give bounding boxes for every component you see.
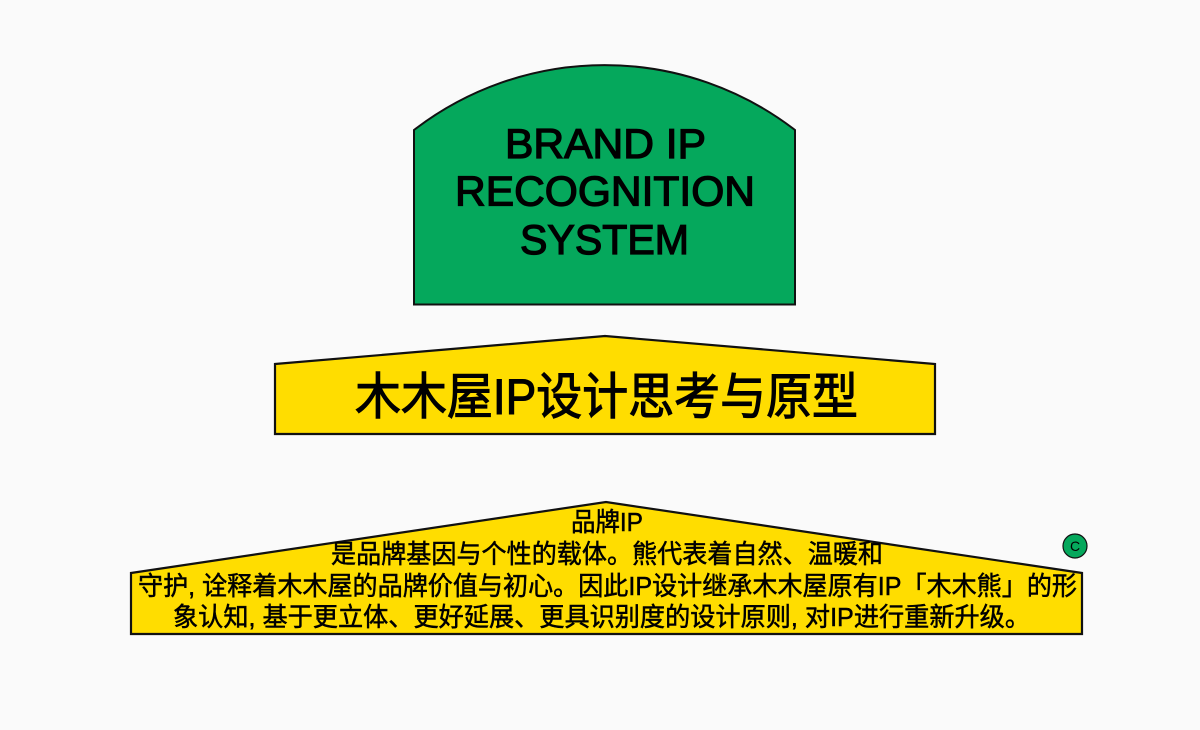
yellow roof-shaped panel <box>131 502 1082 634</box>
heading: BRAND IP RECOGNITION SYSTEM: BRAND IP <box>505 120 706 167</box>
heading: BRAND IP RECOGNITION SYSTEM: RECOGNITION <box>455 168 755 214</box>
description text block: 是品牌基因与个性的载体。熊代表着自然、温暖和 <box>331 539 883 569</box>
green arched shape <box>414 65 795 304</box>
description text block <box>138 507 1077 632</box>
heading: BRAND IP RECOGNITION SYSTEM: SYSTEM <box>520 216 689 263</box>
panel: subtitle banner <box>275 336 935 434</box>
subtitle: Mumuwu IP design thinking and prototype: 木木屋IP设计思考与原型 <box>355 369 858 425</box>
panel: brand IP description <box>131 502 1082 634</box>
yellow house-shaped banner <box>275 336 935 434</box>
description text block: 品牌IP <box>571 507 643 537</box>
panel: brand IP recognition system heading <box>414 65 795 304</box>
description text block: 守护, 诠释着木木屋的品牌价值与初心。因此IP设计继承木木屋原有IP「木木熊」的形 <box>138 571 1077 601</box>
heading: BRAND IP RECOGNITION SYSTEM <box>455 120 755 263</box>
icon: copyright badge: C <box>1070 538 1080 554</box>
description text block: 象认知, 基于更立体、更好延展、更具识别度的设计原则, 对IP进行重新升级。 <box>173 602 1030 632</box>
icon: copyright badge <box>1063 534 1087 558</box>
